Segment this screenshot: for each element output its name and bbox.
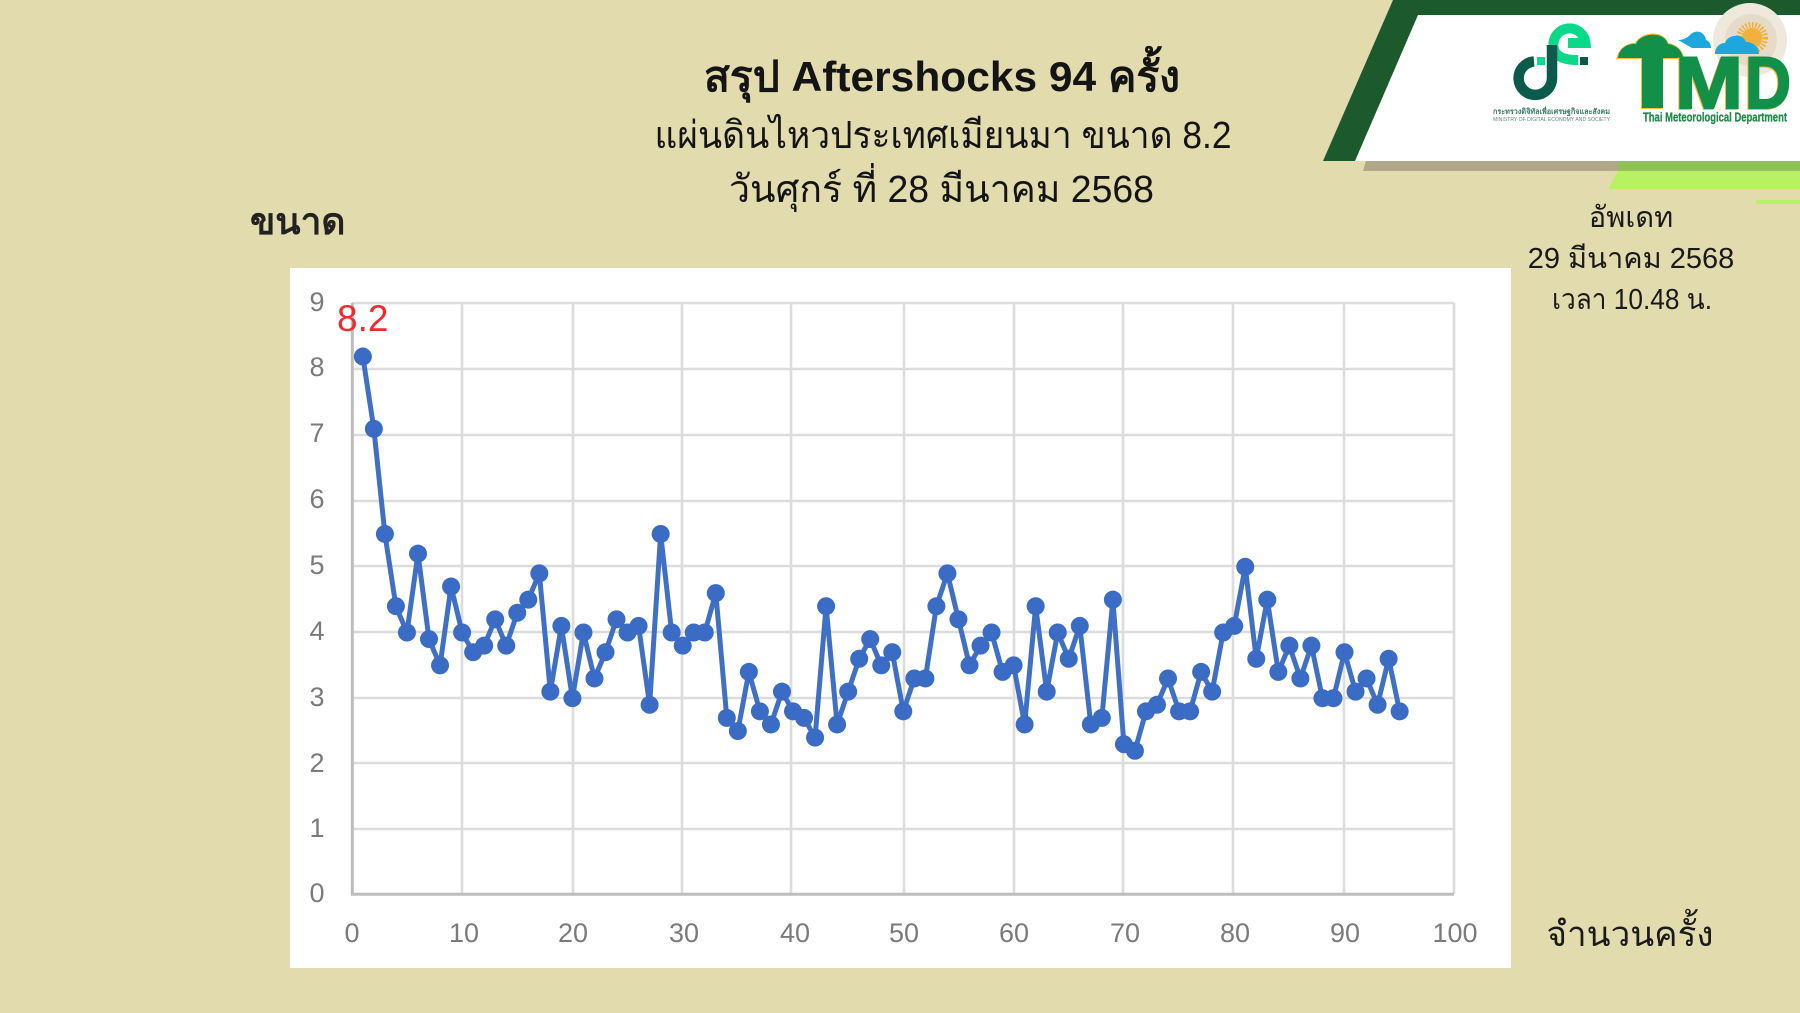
x axis labels: 40: [780, 918, 810, 948]
title: [654, 45, 1232, 212]
grid lines: [352, 303, 1454, 894]
update timestamp: [1528, 202, 1734, 316]
y axis labels: 8: [309, 352, 325, 382]
update timestamp: 29 มีนาคม 2568: [1528, 243, 1734, 275]
y axis labels: 1: [309, 813, 325, 843]
y axis labels: 9: [309, 287, 325, 317]
x axis labels: 10: [449, 918, 479, 948]
line chart: [309, 287, 1478, 948]
TMD lettering: [1642, 0, 1791, 125]
y axis labels: 3: [309, 682, 325, 712]
y axis labels: [309, 287, 325, 908]
logo: Ministry of Digital Economy and Society: กระทรวงดิจิทัลเพื่อเศรษฐกิจและสังคม: [1493, 105, 1610, 117]
x axis labels: 80: [1220, 918, 1250, 948]
y axis labels: 0: [309, 878, 325, 908]
title: แผ่นดินไหวประเทศเมียนมา ขนาด 8.2: [654, 114, 1232, 157]
y axis labels: 5: [309, 550, 325, 580]
logo: Ministry of Digital Economy and Society: [1493, 28, 1610, 123]
x axis title: จำนวนครั้ง: [1547, 908, 1713, 954]
x axis labels: 20: [558, 918, 588, 948]
header banner: [1323, 0, 1800, 204]
x axis labels: 100: [1432, 918, 1478, 948]
y axis labels: 6: [309, 484, 325, 514]
x axis labels: 90: [1330, 918, 1360, 948]
x axis labels: 50: [889, 918, 919, 948]
TMD lettering: D: [1744, 44, 1790, 125]
peak value label: 8.2: [337, 298, 388, 339]
x axis labels: 0: [344, 918, 360, 948]
panel: chart background: [290, 268, 1511, 968]
TMD lettering: M: [1675, 43, 1743, 124]
y axis labels: 2: [309, 748, 325, 778]
title: สรุป Aftershocks 94 ครั้ง: [704, 45, 1180, 103]
TMD lettering: M: [1674, 44, 1742, 125]
update timestamp: เวลา 10.48 น.: [1552, 284, 1712, 316]
y axis title: ขนาด: [250, 201, 345, 242]
x axis labels: 70: [1110, 918, 1140, 948]
y axis labels: 4: [309, 616, 325, 646]
TMD lettering: D: [1745, 43, 1791, 124]
x axis labels: 60: [999, 918, 1029, 948]
logo: Ministry of Digital Economy and Society: MINISTRY OF DIGITAL ECONOMY AND SOCIETY: [1493, 117, 1610, 123]
x axis labels: [344, 918, 1478, 948]
update timestamp: อัพเดท: [1589, 202, 1673, 234]
y axis labels: 7: [309, 418, 325, 448]
title: วันศุกร์ ที่ 28 มีนาคม 2568: [729, 163, 1154, 212]
logo: Thai Meteorological Department: [1616, 0, 1791, 125]
x axis labels: 30: [669, 918, 699, 948]
data series: magnitude of each aftershock: [363, 357, 1400, 751]
